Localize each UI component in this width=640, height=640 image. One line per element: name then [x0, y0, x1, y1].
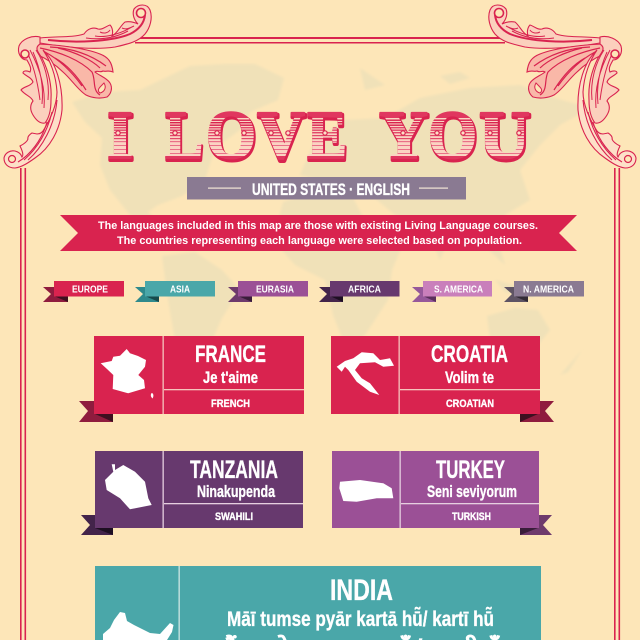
panel: Croatia	[331, 336, 554, 422]
title	[107, 97, 531, 175]
title: V	[257, 97, 305, 173]
panel: Croatia: CROATIA	[431, 341, 508, 368]
title: O	[207, 99, 257, 175]
panel: India: Māī tumse pyār kartā hū̃/ kartī hū̃	[227, 607, 494, 631]
ribbon tail	[520, 401, 554, 422]
panel: Tanzania: SWAHILI	[215, 511, 253, 523]
subtitle band	[187, 177, 466, 200]
title: E	[308, 99, 348, 175]
panel: Tanzania: TANZANIA	[190, 456, 278, 484]
title: L	[166, 99, 204, 175]
icon: Turkey map	[339, 480, 393, 502]
ribbon tail	[81, 515, 113, 535]
title: V	[258, 99, 306, 175]
title: U	[480, 99, 531, 175]
ornament: top left corner	[4, 5, 151, 168]
panel: Turkey	[332, 451, 552, 535]
legend: South America: S. AMERICA	[434, 284, 483, 296]
title: L	[165, 97, 203, 173]
panel: France: FRENCH	[211, 398, 250, 410]
legend: Asia	[135, 281, 215, 302]
intro banner	[60, 215, 577, 251]
icon: India map	[103, 612, 174, 640]
title: E	[307, 97, 347, 173]
legend: Europe	[43, 281, 124, 302]
title: O	[206, 97, 256, 173]
title: Y	[379, 97, 428, 173]
legend: Africa: AFRICA	[348, 284, 381, 296]
panel: Tanzania	[81, 451, 303, 535]
panel: France: FRANCE	[195, 341, 266, 368]
world map	[72, 64, 590, 375]
panel: France: Je t'aime	[203, 368, 258, 387]
title: Y	[380, 99, 429, 175]
ornament: top right corner	[489, 5, 636, 168]
legend: North America	[504, 281, 584, 302]
intro banner: The languages included in this map are those with existing Living Language courses.	[98, 220, 538, 232]
panel: Croatia: CROATIAN	[446, 398, 494, 410]
legend: Asia: ASIA	[170, 284, 190, 296]
title: O	[428, 97, 477, 173]
subtitle band: UNITED STATES · ENGLISH	[252, 180, 410, 199]
legend: North America: N. AMERICA	[523, 284, 574, 296]
panel: India: INDIA	[330, 574, 393, 607]
ribbon tail	[520, 515, 552, 535]
title: O	[429, 99, 478, 175]
icon: Tanzania map	[105, 464, 152, 509]
title: U	[479, 97, 530, 173]
legend: Eurasia	[228, 281, 308, 302]
panel: Turkey: TURKISH	[452, 511, 491, 523]
panel: Turkey: Seni seviyorum	[427, 482, 517, 501]
panel: Turkey: TURKEY	[436, 456, 505, 484]
legend: South America	[412, 281, 492, 302]
legend: Eurasia: EURASIA	[256, 284, 294, 296]
title: I	[108, 99, 134, 175]
icon: Croatia map	[337, 352, 394, 395]
intro banner: The countries representing each language were selected based on population.	[117, 235, 522, 247]
panel: France	[79, 336, 304, 422]
legend: Africa	[319, 281, 400, 302]
ribbon tail	[79, 401, 113, 422]
legend: Europe: EUROPE	[72, 284, 108, 296]
panel: Tanzania: Ninakupenda	[197, 482, 275, 501]
title: I	[107, 97, 133, 173]
panel: Croatia: Volim te	[445, 368, 494, 387]
panel: India	[95, 566, 541, 640]
icon: France map	[101, 349, 153, 398]
